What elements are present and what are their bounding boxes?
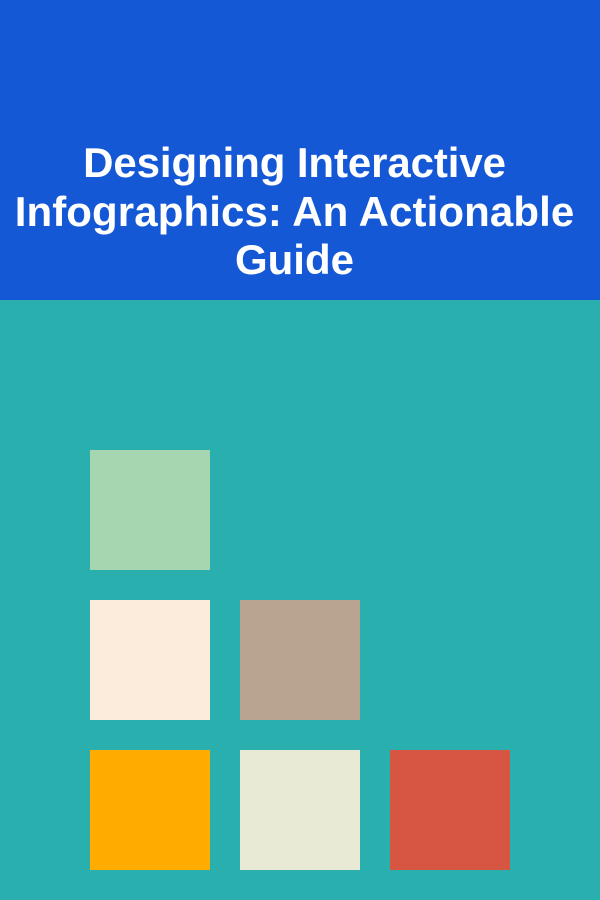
title: Guide	[235, 236, 354, 283]
square: cream	[90, 600, 210, 720]
header band	[0, 0, 600, 300]
square: pale beige	[240, 750, 360, 870]
title: Designing Interactive	[83, 139, 506, 186]
title: Infographics: An Actionable	[15, 188, 574, 235]
title	[15, 139, 574, 283]
square: taupe	[240, 600, 360, 720]
square: red	[390, 750, 510, 870]
square: light green	[90, 450, 210, 570]
square: amber	[90, 750, 210, 870]
